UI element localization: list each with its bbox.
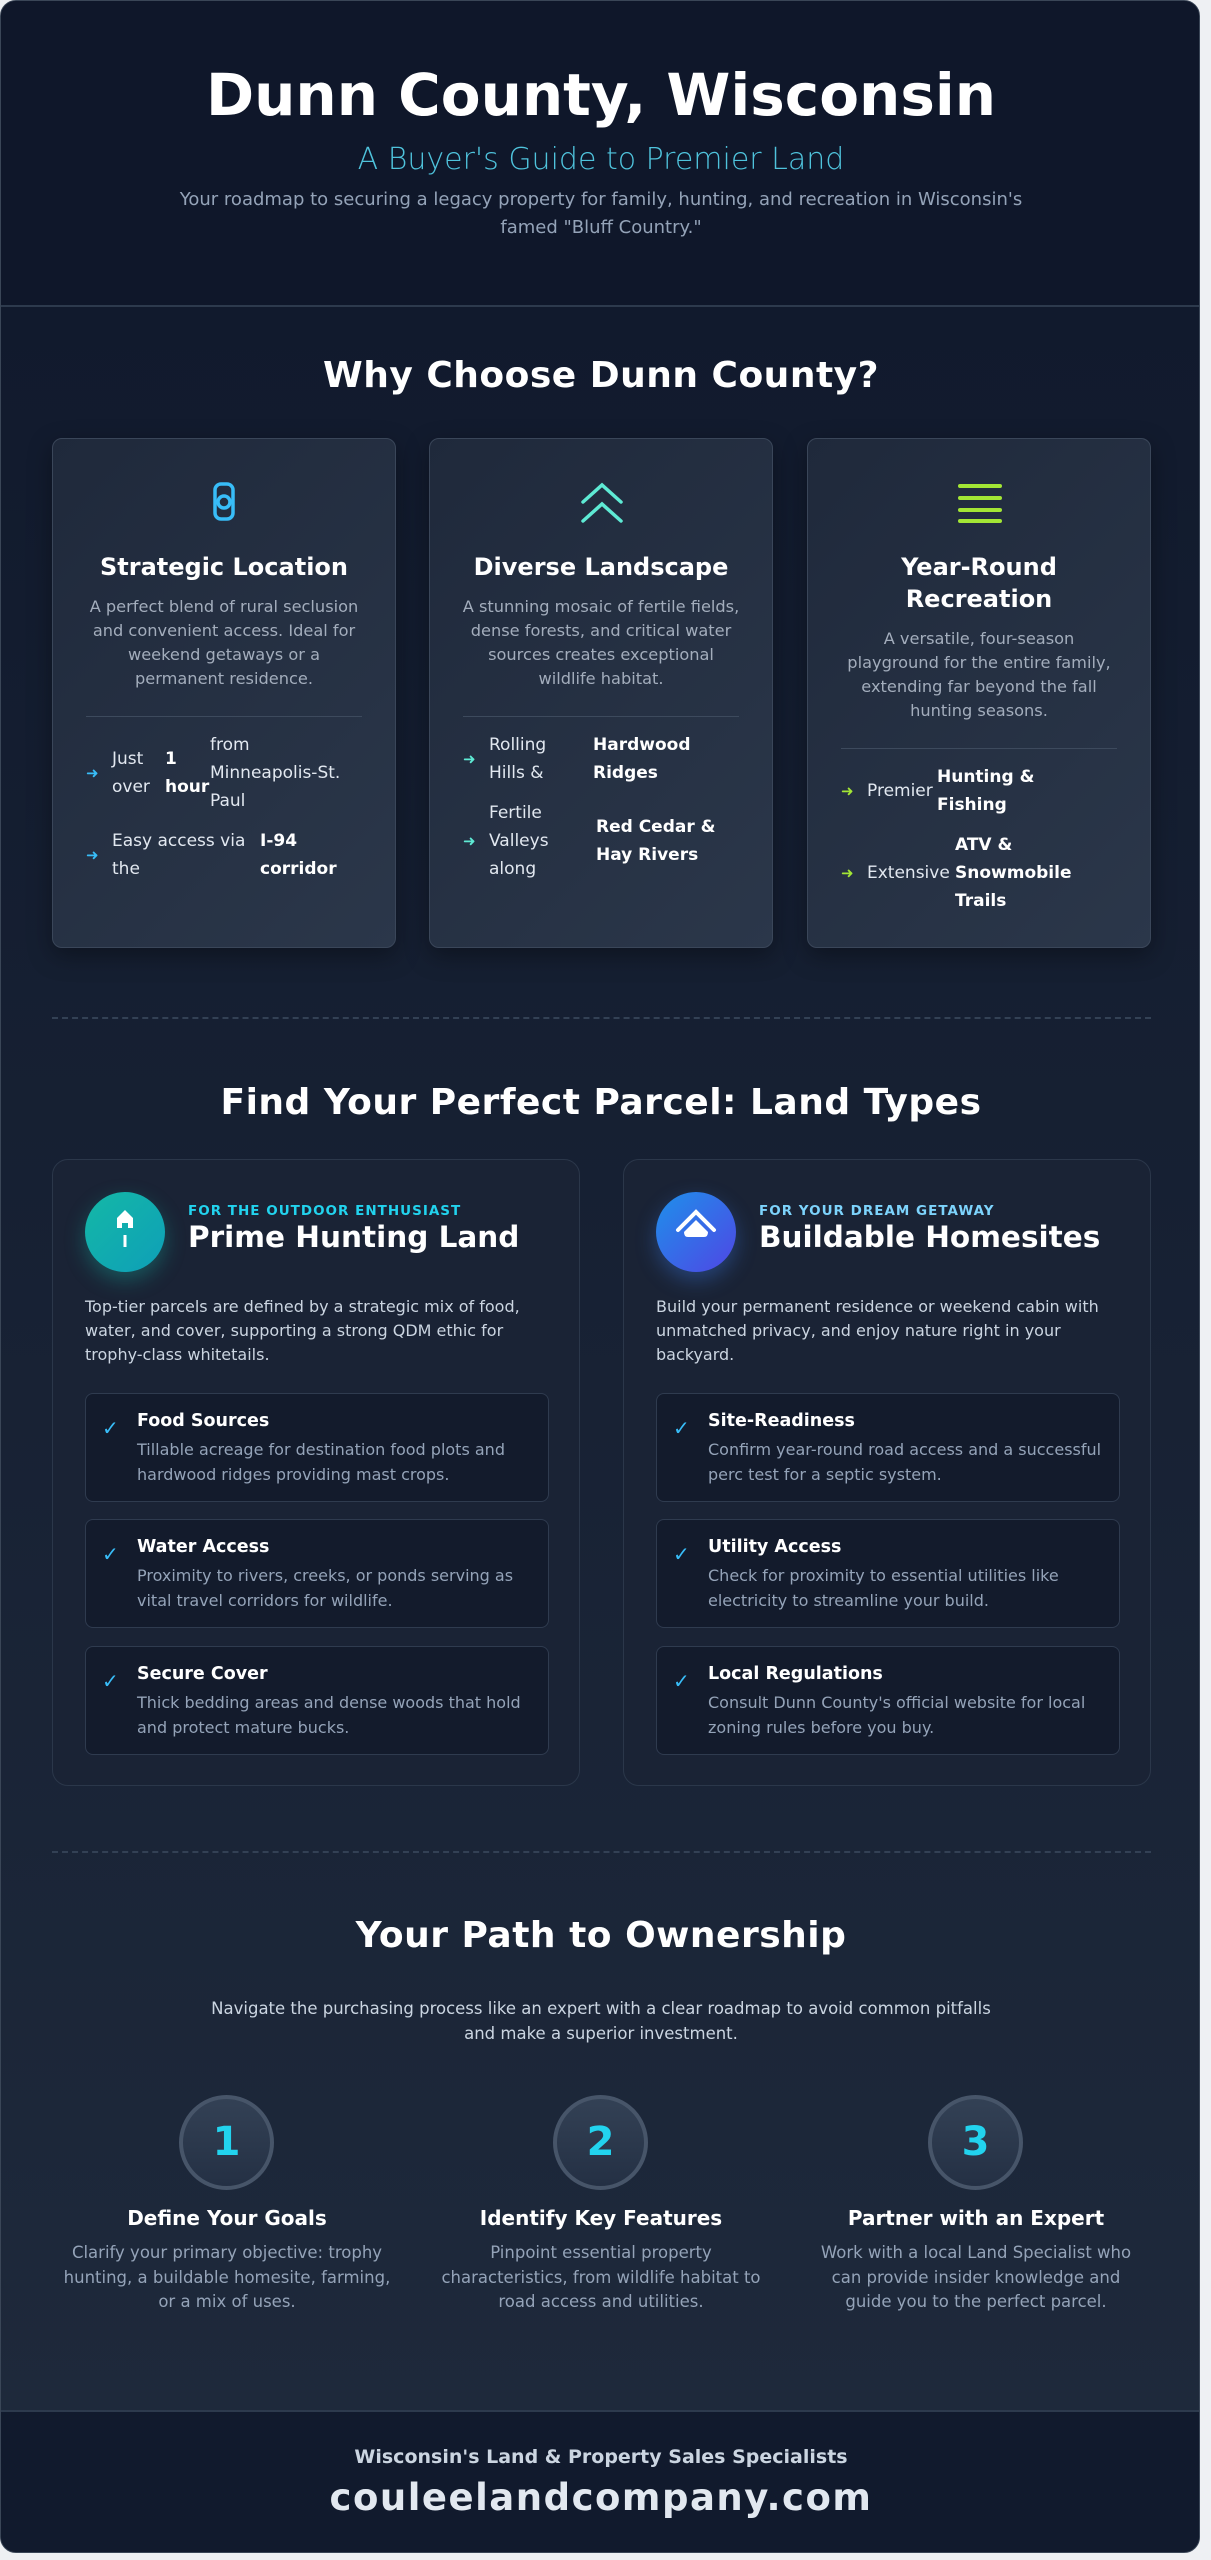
panel: year-round recreation	[807, 438, 1151, 948]
item: food sources: Tillable acreage for destination food plots and	[137, 1440, 505, 1459]
list item: Hunting & Fishing	[937, 767, 1034, 815]
panel: buildable homesites	[623, 1159, 1151, 1786]
item: food sources: ✓	[102, 1416, 119, 1440]
item: site readiness: Confirm year-round road access and a successful	[708, 1440, 1101, 1459]
item: food sources	[85, 1393, 549, 1502]
panel text	[84, 1297, 520, 1364]
card text	[462, 597, 739, 688]
list item	[86, 831, 337, 879]
step text: road access and utilities.	[498, 2292, 704, 2311]
heading: land types: Find Your Perfect Parcel: Land Types	[220, 1082, 982, 1123]
list item: Just over	[112, 749, 150, 797]
card text: sources creates exceptional	[488, 645, 714, 664]
card text	[847, 629, 1111, 720]
card title: Diverse Landscape	[474, 553, 728, 581]
card text: wildlife habitat.	[538, 669, 664, 688]
panel text: trophy-class whitetails.	[85, 1345, 270, 1364]
panel text: Build your permanent residence or weekend cabin with	[656, 1297, 1099, 1316]
panel text: backyard.	[656, 1345, 734, 1364]
icon: hunting stand	[85, 1192, 165, 1272]
icon: house	[656, 1192, 736, 1272]
item: local regulations: ✓	[673, 1669, 690, 1693]
panel text: water, and cover, supporting a strong QDM ethic for	[85, 1321, 503, 1340]
step text: hunting, a buildable homesite, farming,	[64, 2268, 390, 2286]
list item: I-94 corridor	[260, 831, 337, 879]
intro text: Your roadmap to securing a legacy property for family, hunting, and recreation in Wisconsin's	[180, 189, 1022, 210]
item: local regulations: Local Regulations	[708, 1664, 883, 1684]
item: secure cover: Thick bedding areas and dense woods that hold	[137, 1693, 521, 1712]
item: utility access: ✓	[673, 1542, 690, 1566]
list item: ➜	[841, 782, 854, 800]
item: utility access: Utility Access	[708, 1537, 841, 1557]
intro text	[180, 189, 1022, 238]
panel title: Prime Hunting Land	[188, 1220, 519, 1254]
item: utility access	[656, 1519, 1120, 1628]
item: site readiness: ✓	[673, 1416, 690, 1440]
list item: Red Cedar & Hay Rivers	[596, 817, 715, 865]
card text	[90, 597, 358, 688]
list item: Premier	[867, 781, 933, 801]
card text: A stunning mosaic of fertile fields,	[463, 597, 739, 616]
card text: and convenient access. Ideal for	[93, 621, 355, 640]
panel text: Top-tier parcels are defined by a strategic mix of food,	[85, 1297, 520, 1316]
card text: extending far beyond the fall	[861, 677, 1097, 696]
heading: path to ownership: Your Path to Ownership	[356, 1915, 846, 1956]
step text: can provide insider knowledge and	[832, 2268, 1120, 2286]
list item: Easy access via the	[112, 831, 245, 879]
item: utility access: electricity to streamline your build.	[708, 1591, 989, 1610]
item: water access: Proximity to rivers, creeks, or ponds serving as	[137, 1566, 513, 1585]
panel text	[656, 1297, 1099, 1364]
item: water access: Water Access	[137, 1537, 269, 1557]
card text: playground for the entire family,	[847, 653, 1111, 672]
step text: characteristics, from wildlife habitat to	[441, 2268, 761, 2286]
item: secure cover: Secure Cover	[137, 1664, 268, 1684]
item: food sources: Food Sources	[137, 1411, 269, 1431]
panel: prime hunting land	[52, 1159, 580, 1786]
intro text: path: and make a superior investment.	[464, 2024, 738, 2043]
list item: Rolling Hills &	[489, 735, 546, 783]
list item: Hardwood Ridges	[593, 735, 690, 783]
list item: ➜	[463, 832, 476, 850]
item: water access	[85, 1519, 549, 1628]
circle 3: 3	[962, 2119, 989, 2165]
card text: A versatile, four-season	[884, 629, 1074, 648]
subtitle: A Buyer's Guide to Premier Land	[358, 142, 844, 177]
item: local regulations: Consult Dunn County's official website for local	[708, 1693, 1085, 1712]
card title	[900, 553, 1057, 613]
item: secure cover	[85, 1646, 549, 1755]
item: local regulations	[656, 1646, 1120, 1755]
header	[1, 1, 1201, 307]
item: local regulations: zoning rules before you buy.	[708, 1718, 934, 1737]
step 2	[441, 2095, 761, 2311]
step text: Clarify your primary objective: trophy	[72, 2243, 382, 2262]
panel: strategic location	[52, 438, 396, 948]
step text: or a mix of uses.	[158, 2292, 296, 2311]
list item: from Minneapolis-St. Paul	[210, 735, 340, 811]
list item: Extensive	[867, 863, 950, 883]
circle 2: 2	[587, 2119, 614, 2165]
step title: Define Your Goals	[127, 2206, 327, 2230]
list item: ➜	[841, 864, 854, 882]
card title: Recreation	[906, 585, 1052, 613]
intro text: path	[211, 1999, 991, 2043]
step text	[441, 2243, 761, 2311]
icon: lines	[958, 484, 1002, 523]
item: secure cover: and protect mature bucks.	[137, 1718, 349, 1737]
item: water access: vital travel corridors for wildlife.	[137, 1591, 393, 1610]
intro text: famed "Bluff Country."	[500, 217, 702, 238]
item: utility access: Check for proximity to essential utilities like	[708, 1566, 1059, 1585]
card title: Strategic Location	[100, 553, 348, 581]
item: secure cover: ✓	[102, 1669, 119, 1693]
circle 2	[553, 2095, 648, 2190]
list item	[86, 735, 340, 811]
card text: permanent residence.	[135, 669, 313, 688]
heading: why choose: Why Choose Dunn County?	[323, 355, 879, 396]
footer	[1, 2410, 1201, 2560]
kicker: FOR THE OUTDOOR ENTHUSIAST	[188, 1203, 461, 1219]
panel text: unmatched privacy, and enjoy nature right in your	[656, 1321, 1061, 1340]
icon: location pin	[213, 482, 235, 521]
footer url: couleelandcompany.com	[330, 2476, 872, 2519]
list item: 1 hour	[165, 749, 209, 797]
card text: A perfect blend of rural seclusion	[90, 597, 358, 616]
kicker: FOR YOUR DREAM GETAWAY	[759, 1203, 995, 1219]
card text: dense forests, and critical water	[471, 621, 731, 640]
list item: ➜	[86, 764, 99, 782]
list item	[841, 767, 1034, 815]
card text: weekend getaways or a	[128, 645, 320, 664]
step text: Pinpoint essential property	[490, 2243, 712, 2262]
step 3	[821, 2095, 1131, 2311]
step title: Identify Key Features	[480, 2206, 722, 2230]
item: site readiness	[656, 1393, 1120, 1502]
item: food sources: hardwood ridges providing mast crops.	[137, 1465, 449, 1484]
card text: hunting seasons.	[910, 701, 1048, 720]
circle 1: 1	[213, 2119, 240, 2165]
list item	[841, 835, 1071, 911]
list item: ➜	[86, 846, 99, 864]
step title: Partner with an Expert	[848, 2206, 1104, 2230]
list item: Fertile Valleys along	[489, 803, 549, 879]
step 1	[64, 2095, 390, 2311]
item: site readiness: perc test for a septic system.	[708, 1465, 942, 1484]
item: site readiness: Site-Readiness	[708, 1411, 855, 1431]
icon: chevrons	[581, 482, 623, 523]
step text: Work with a local Land Specialist who	[821, 2243, 1131, 2262]
step text: guide you to the perfect parcel.	[845, 2292, 1107, 2311]
item: water access: ✓	[102, 1542, 119, 1566]
panel: diverse landscape	[429, 438, 773, 948]
step text	[821, 2243, 1131, 2311]
list item	[463, 735, 690, 783]
step text	[64, 2243, 390, 2311]
intro text: path: Navigate the purchasing process like an expert with a clear roadmap to avoid common pitfalls	[211, 1999, 991, 2018]
panel title: Buildable Homesites	[759, 1220, 1100, 1254]
list item: ➜	[463, 750, 476, 768]
circle 1	[179, 2095, 274, 2190]
card title: Year-Round	[901, 553, 1057, 581]
list item: ATV & Snowmobile Trails	[955, 835, 1071, 911]
list item	[463, 803, 715, 879]
footer tagline: Wisconsin's Land & Property Sales Specialists	[354, 2446, 848, 2468]
circle 3	[928, 2095, 1023, 2190]
title: Dunn County, Wisconsin	[206, 61, 996, 129]
